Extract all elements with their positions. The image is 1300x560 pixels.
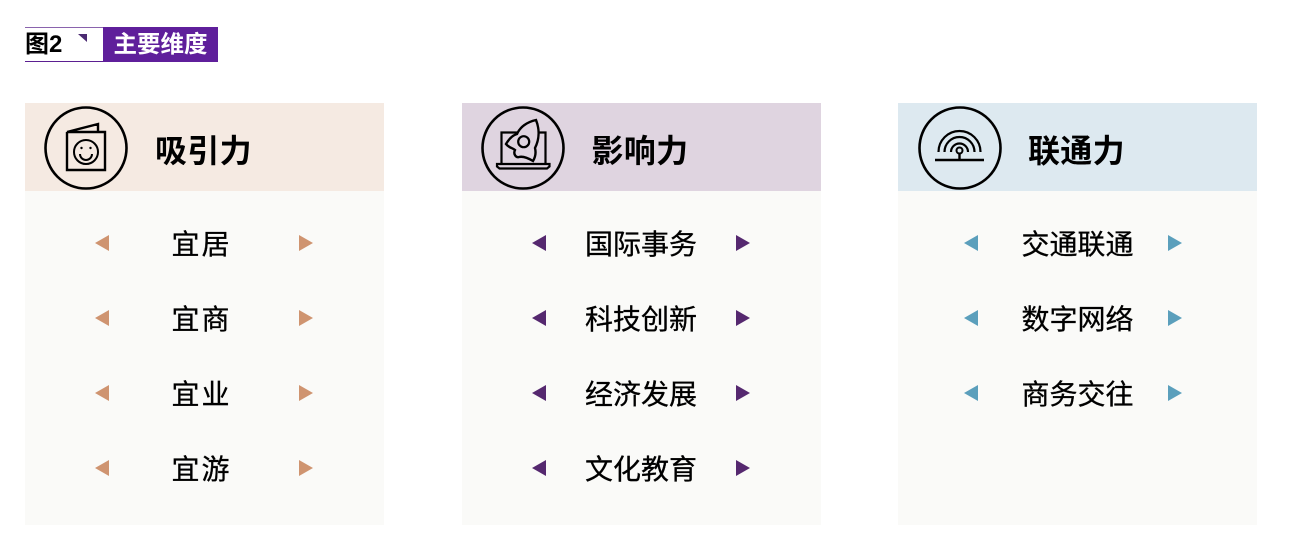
item: 商务交往: 商务交往 bbox=[1021, 379, 1134, 410]
item: 商务交往 bbox=[964, 379, 1182, 410]
item: 经济发展 bbox=[532, 379, 750, 410]
item: 宜业: 宜业 bbox=[171, 379, 232, 410]
item: 宜居: 宜居 bbox=[171, 229, 232, 260]
item: 交通联通 bbox=[964, 229, 1182, 260]
item: 科技创新: 科技创新 bbox=[585, 304, 697, 335]
tag title bbox=[103, 27, 218, 62]
item: 国际事务 bbox=[532, 229, 750, 260]
figure number: 图2 bbox=[25, 31, 62, 58]
icon: rocket and laptop bbox=[481, 106, 565, 190]
tag title: 主要维度 bbox=[114, 31, 208, 57]
item: 宜商: 宜商 bbox=[171, 304, 232, 335]
item: 宜游 bbox=[95, 454, 313, 485]
panel heading: 联通力 bbox=[1028, 133, 1125, 169]
figure tag bbox=[25, 27, 218, 62]
item: 文化教育: 文化教育 bbox=[585, 454, 697, 485]
panel header bbox=[898, 103, 1257, 191]
item: 宜居 bbox=[95, 229, 313, 260]
item: 交通联通: 交通联通 bbox=[1021, 229, 1134, 260]
item: 宜业 bbox=[95, 379, 313, 410]
panel heading: 吸引力 bbox=[155, 133, 252, 169]
item: 国际事务: 国际事务 bbox=[585, 229, 697, 260]
icon: signal arcs bbox=[918, 106, 1002, 190]
icon: greeting card bbox=[44, 106, 128, 190]
item: 数字网络: 数字网络 bbox=[1021, 304, 1134, 335]
item: 宜游: 宜游 bbox=[171, 454, 232, 485]
item: 科技创新 bbox=[532, 304, 750, 335]
item: 文化教育 bbox=[532, 454, 750, 485]
tag corner mark bbox=[78, 34, 87, 42]
panel header bbox=[25, 103, 384, 191]
panel: 影响力 bbox=[462, 103, 820, 525]
figure number bbox=[25, 27, 103, 62]
panel: 吸引力 bbox=[25, 103, 384, 525]
item: 经济发展: 经济发展 bbox=[585, 379, 697, 410]
panel heading: 影响力 bbox=[592, 133, 688, 169]
item: 宜商 bbox=[95, 304, 313, 335]
item: 数字网络 bbox=[964, 304, 1182, 335]
panel: 联通力 bbox=[898, 103, 1257, 525]
panel header bbox=[462, 103, 820, 191]
